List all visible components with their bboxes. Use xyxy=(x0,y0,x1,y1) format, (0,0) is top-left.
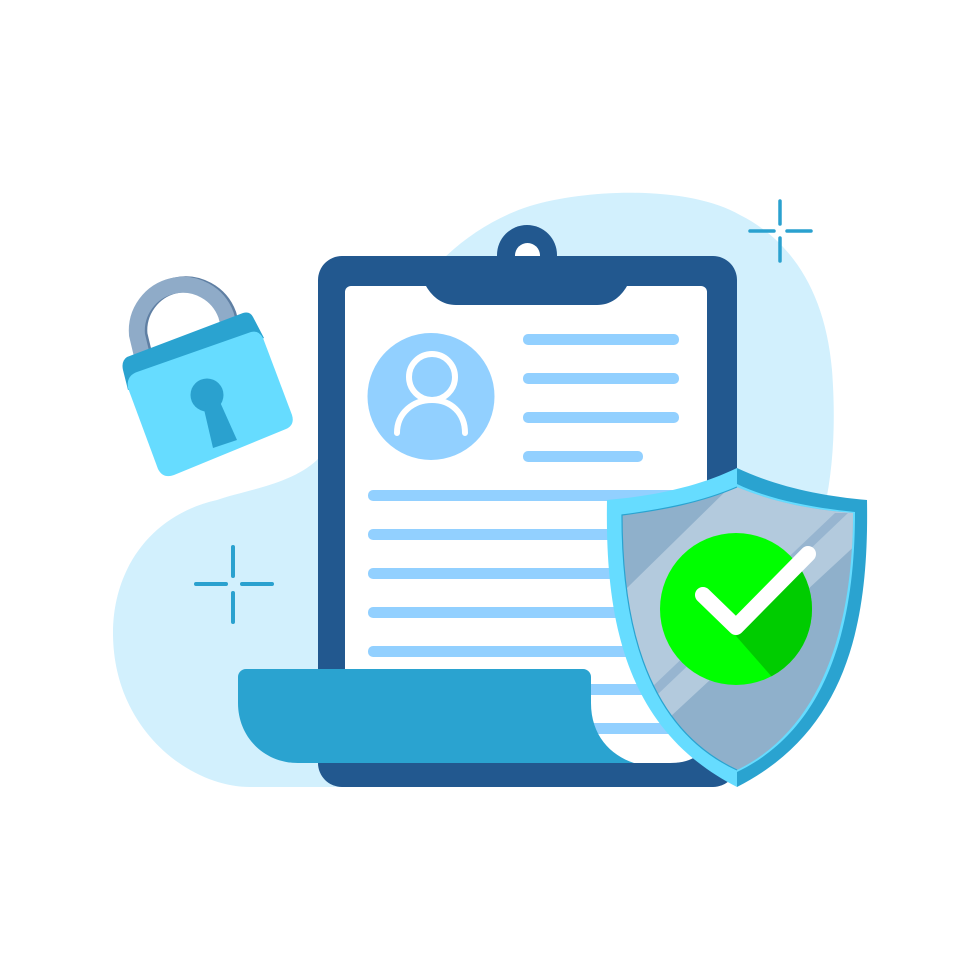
body text lines xyxy=(368,490,680,734)
shield xyxy=(600,468,870,787)
padlock body front xyxy=(128,332,293,476)
profile text lines xyxy=(523,334,679,462)
clipboard xyxy=(238,225,737,787)
check badge xyxy=(660,533,816,685)
shield face xyxy=(622,487,853,770)
icon: padlock xyxy=(122,284,293,476)
shield left side xyxy=(607,468,737,787)
clipboard board xyxy=(318,256,737,787)
avatar xyxy=(368,333,494,460)
clipboard clip xyxy=(426,286,627,305)
check mark xyxy=(703,554,808,627)
shield right side xyxy=(737,468,867,787)
clipboard paper xyxy=(345,286,707,763)
shield inner rim xyxy=(737,484,855,772)
clipboard ring xyxy=(497,225,557,262)
glass highlight xyxy=(627,484,860,717)
glass stripe xyxy=(652,513,848,695)
icon: sparkle bottom left xyxy=(196,547,272,622)
background blob xyxy=(113,193,834,787)
curled paper edge xyxy=(238,669,634,763)
icon: sparkle top right xyxy=(750,201,811,261)
clipboard ring hole xyxy=(515,243,540,256)
padlock body back xyxy=(122,312,264,390)
icon: keyhole xyxy=(190,378,237,448)
padlock shackle xyxy=(137,284,232,360)
illustration xyxy=(113,192,868,787)
badge shadow xyxy=(736,572,812,676)
shield inner edge line xyxy=(622,487,737,770)
